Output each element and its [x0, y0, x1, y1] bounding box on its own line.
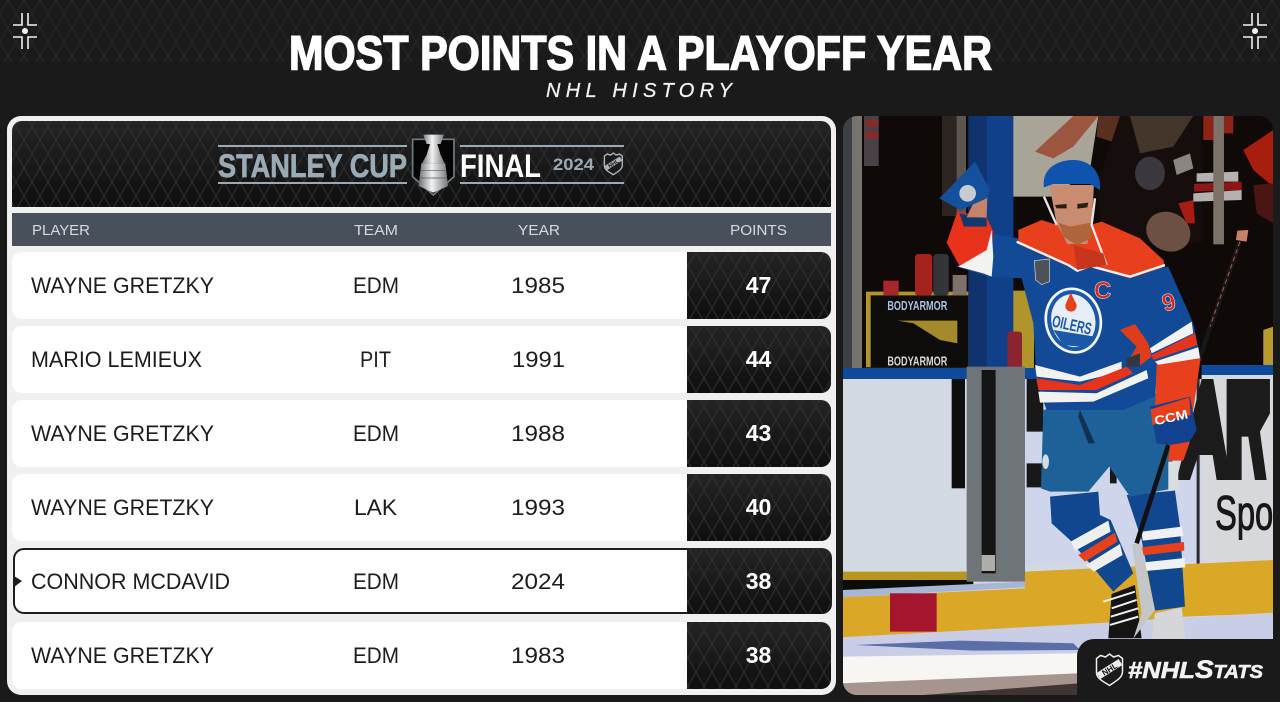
- glove at hip: [1120, 324, 1152, 367]
- icon: NHL shield small: [604, 153, 622, 175]
- big board lettering: [1177, 379, 1231, 480]
- photo: Connor McDavid on the ice: [843, 116, 1276, 700]
- title: MOST POINTS IN A PLAYOFF YEAR: [289, 28, 992, 80]
- row: Connor McDavid 2024 (highlighted): CONNOR MCDAVID: [31, 569, 230, 594]
- hat held in raised hand: [939, 162, 990, 210]
- player: stick blade and lower glove: CCM: [1153, 407, 1189, 428]
- player: hockey stick shaft: [1200, 230, 1248, 364]
- panel: leaderboard table: [7, 116, 836, 695]
- row: Wayne Gretzky 1988: 43: [746, 420, 771, 446]
- row: Connor McDavid 2024 (highlighted): 38: [746, 568, 771, 594]
- icon: Stanley Cup shield: [413, 135, 454, 195]
- row: Wayne Gretzky 1988: 1988: [511, 421, 565, 446]
- row: Connor McDavid 2024 (highlighted): 2024: [511, 569, 565, 594]
- photo upper half: crowd and glass: BODYARMOR: [887, 353, 948, 368]
- table column headers: PLAYER: [32, 222, 90, 239]
- row: Wayne Gretzky 1983: 1983: [511, 643, 565, 668]
- player: jersey, helmet and raised arm: 9: [1159, 288, 1179, 318]
- row: Wayne Gretzky 1993: WAYNE GRETZKY: [31, 495, 214, 520]
- jersey stripes: [1035, 362, 1122, 382]
- Stanley Cup Final patch: [1034, 259, 1049, 285]
- table column headers: YEAR: [518, 222, 560, 239]
- photo lower half: boards and ice: [843, 365, 1276, 700]
- tag: #NHLStats hashtag: [1077, 639, 1280, 702]
- icon: NHL shield: [1096, 654, 1122, 686]
- subtitle: NHL HISTORY: [546, 80, 734, 102]
- panel header: Stanley Cup Final logo: 2024: [553, 155, 595, 174]
- row: Connor McDavid 2024 (highlighted): [14, 548, 832, 614]
- photo upper half: crowd and glass: BODYARMOR: [887, 298, 948, 313]
- Oilers crest: [1044, 288, 1102, 354]
- row: Wayne Gretzky 1985: 47: [746, 272, 771, 298]
- row: Wayne Gretzky 1993: [12, 474, 831, 541]
- row: Wayne Gretzky 1985: [12, 252, 831, 319]
- player: skates, socks and pants: [1041, 393, 1186, 639]
- row: Wayne Gretzky 1983: WAYNE GRETZKY: [31, 643, 214, 668]
- row: Wayne Gretzky 1983: EDM: [353, 643, 399, 668]
- row: Wayne Gretzky 1993: 40: [746, 494, 771, 520]
- row: Mario Lemieux 1991: [12, 326, 831, 393]
- row: Mario Lemieux 1991: 44: [746, 346, 771, 372]
- row: Wayne Gretzky 1988: [12, 400, 831, 467]
- row: Wayne Gretzky 1985: EDM: [353, 273, 399, 298]
- row: Wayne Gretzky 1983: 38: [746, 642, 771, 668]
- row: Wayne Gretzky 1983: [12, 622, 831, 689]
- row: Wayne Gretzky 1985: 1985: [511, 273, 565, 298]
- icon: NHL shield small: NHL: [608, 158, 621, 170]
- table column headers: TEAM: [354, 222, 398, 239]
- head and helmet: [1049, 185, 1094, 244]
- row: Mario Lemieux 1991: MARIO LEMIEUX: [31, 347, 202, 372]
- panel header: Stanley Cup Final logo: FINAL: [460, 148, 541, 184]
- table column headers: POINTS: [730, 222, 787, 239]
- row: Mario Lemieux 1991: PIT: [360, 347, 391, 372]
- icon: corner mark left: [13, 13, 37, 49]
- row: Wayne Gretzky 1993: LAK: [354, 495, 397, 520]
- row: Wayne Gretzky 1985: WAYNE GRETZKY: [31, 273, 214, 298]
- icon: corner mark right: [1243, 13, 1267, 49]
- row: Wayne Gretzky 1988: WAYNE GRETZKY: [31, 421, 214, 446]
- player: jersey, helmet and raised arm: [939, 160, 1201, 410]
- row: Connor McDavid 2024 (highlighted): EDM: [353, 569, 399, 594]
- row: Mario Lemieux 1991: 1991: [512, 347, 565, 372]
- row: Wayne Gretzky 1988: EDM: [353, 421, 399, 446]
- row: Wayne Gretzky 1993: 1993: [511, 495, 565, 520]
- player: stick blade and lower glove: [1132, 397, 1197, 639]
- icon: NHL shield: NHL: [1100, 661, 1119, 678]
- icon: row marker arrow: [14, 576, 22, 587]
- tag: #NHLStats hashtag: #NHL STATS: [1128, 656, 1263, 684]
- panel header: Stanley Cup Final logo: STANLEY CUP: [218, 148, 407, 184]
- panel header: Stanley Cup Final logo: [12, 121, 831, 207]
- player: jersey, helmet and raised arm: OILERS: [1050, 312, 1093, 339]
- table column headers: [12, 213, 831, 246]
- photo upper half: crowd and glass: [843, 116, 1273, 369]
- captain letter and number: C: [1094, 277, 1111, 304]
